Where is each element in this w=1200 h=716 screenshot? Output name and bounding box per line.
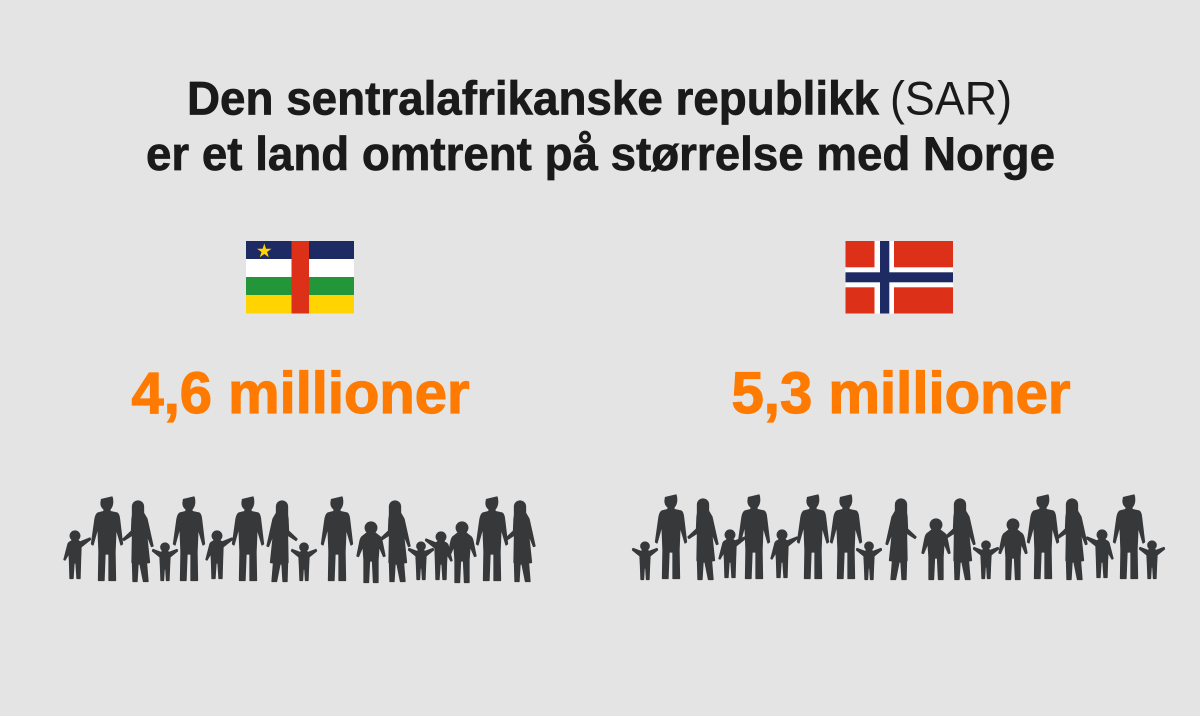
people silhouettes: Central African Republic: [64, 497, 535, 582]
title: er et land omtrent på størrelse med Norge: [146, 127, 1055, 180]
population figure: Norway: 5,3 millioner: [732, 361, 1070, 426]
title: (SAR): [890, 72, 1012, 124]
icon: flag of Norway: [846, 241, 953, 314]
population figure: Central African Republic: 4,6 millioner: [132, 361, 470, 426]
title: [146, 72, 1055, 180]
people silhouettes: Norway: [632, 495, 1164, 580]
icon: flag of the Central African Republic: [246, 241, 354, 314]
title: Den sentralafrikanske republikk: [187, 72, 880, 124]
